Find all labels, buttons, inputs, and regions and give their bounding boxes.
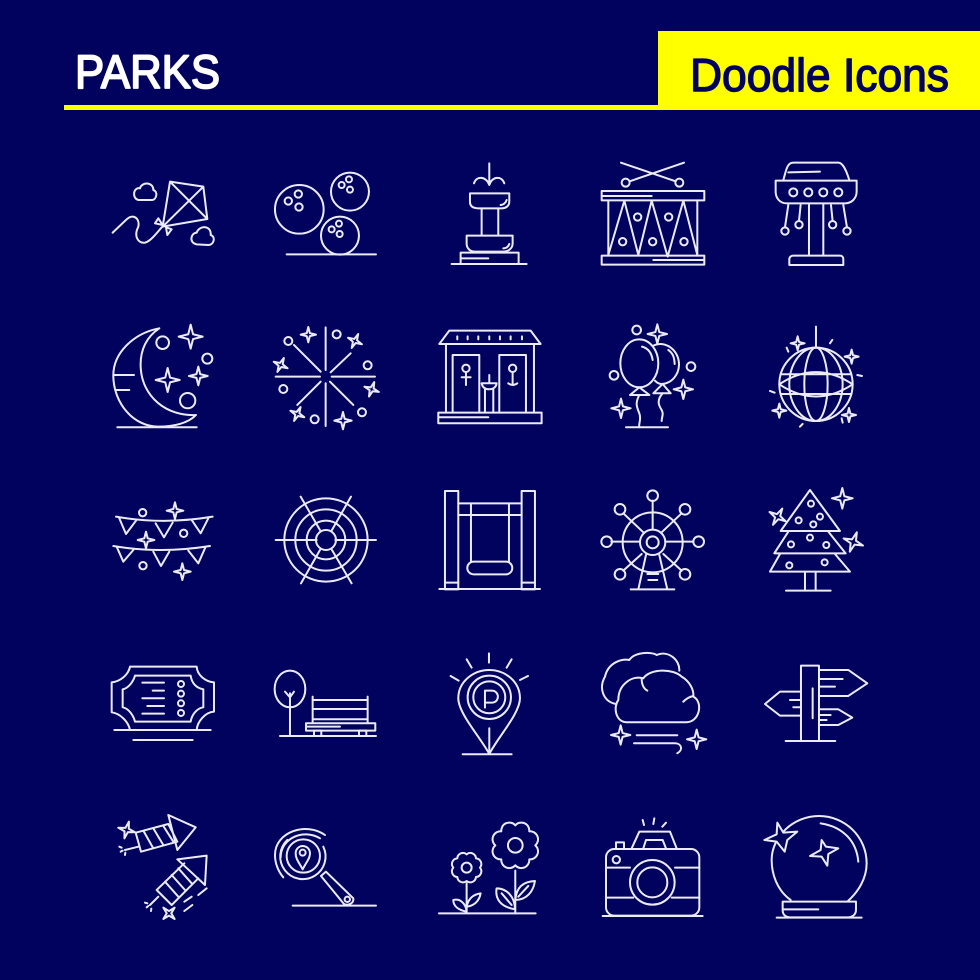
icon: kite <box>113 182 214 245</box>
icon: park bench and tree <box>275 671 376 736</box>
icon: firework rockets <box>116 815 207 925</box>
icon: direction signpost <box>765 666 867 741</box>
icon: fountain <box>452 163 527 264</box>
icon: camera <box>603 818 703 916</box>
title: PARKS: PARKS <box>75 45 220 98</box>
icon: christmas tree <box>765 488 867 591</box>
icon: parking pin <box>451 653 528 754</box>
icon: spider web target <box>276 497 376 583</box>
icon: admission ticket <box>112 667 214 740</box>
icon: disco ball <box>770 327 862 427</box>
icon: playground swing <box>439 491 540 589</box>
icon: crystal ball <box>764 816 867 918</box>
icon: drum <box>602 163 704 265</box>
header panel: yellow tag <box>658 31 980 110</box>
icon: location magnifier <box>275 829 376 906</box>
icon: moon and stars <box>113 325 212 427</box>
icon: swing ride <box>776 163 857 265</box>
icon: balloons <box>610 324 695 427</box>
icon: fireworks burst <box>270 327 381 429</box>
icon: flowers <box>439 823 538 913</box>
icon: clouds and wind <box>602 653 706 753</box>
header bar: yellow underline <box>64 105 664 110</box>
icon: restroom building <box>438 331 542 423</box>
icon: ferris wheel <box>601 490 704 589</box>
subtitle: Doodle Icons: Doodle Icons <box>690 49 949 101</box>
icon: bowling balls <box>275 173 376 255</box>
icon: bunting flags <box>113 502 213 580</box>
